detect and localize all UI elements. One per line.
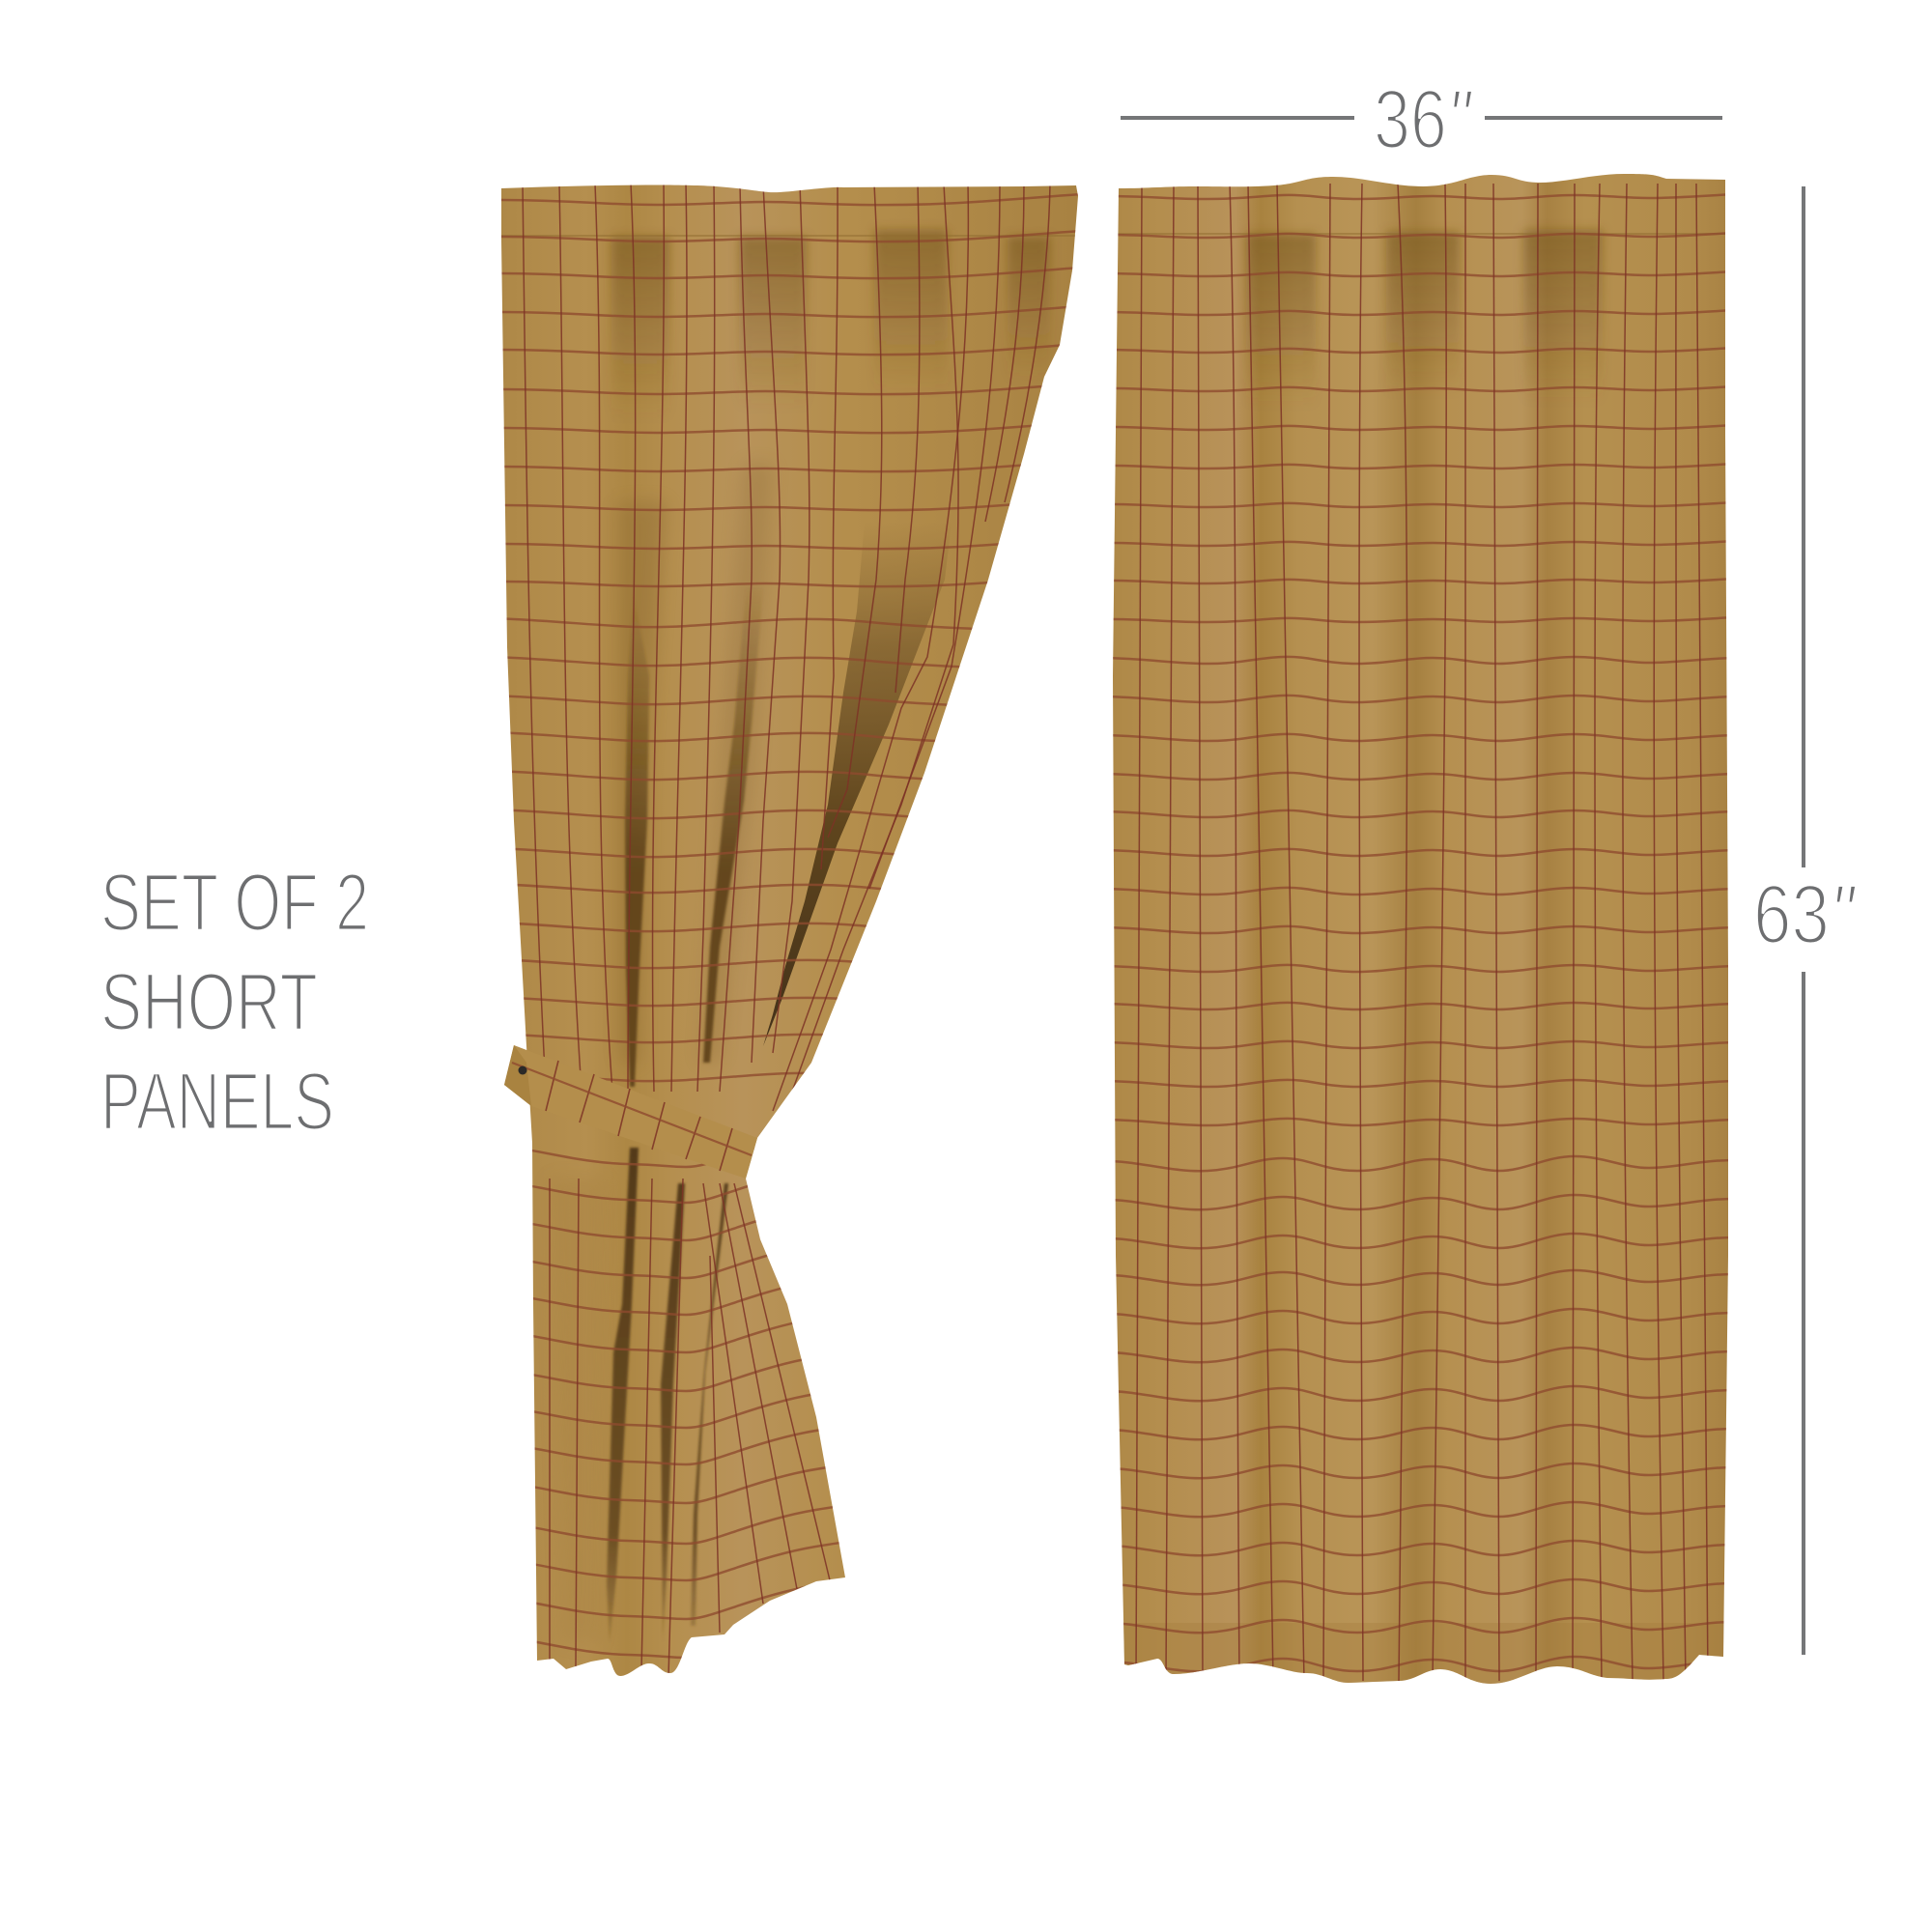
left curtain fabric	[501, 185, 1078, 1676]
text block: set of 2 short panels: PANELS	[100, 1056, 334, 1147]
text block: set of 2 short panels	[100, 857, 369, 1147]
text block: set of 2 short panels: SET OF 2	[100, 857, 369, 948]
left curtain horizontal plaid lines	[493, 194, 1082, 1658]
height dimension: 63 inches	[1753, 186, 1857, 1655]
right curtain horizontal plaid lines	[1106, 194, 1734, 1671]
right curtain vertical plaid lines	[1136, 184, 1708, 1681]
tieback button	[518, 1066, 527, 1074]
right curtain pleat shading	[1111, 230, 1729, 1690]
width dimension: 36 inches: 36"	[1374, 73, 1473, 166]
text block: set of 2 short panels: SHORT	[100, 956, 318, 1047]
left curtain fold shading	[501, 230, 1081, 1642]
right curtain panel, hanging straight	[1106, 174, 1734, 1690]
width dimension: 36 inches	[1121, 73, 1722, 166]
tieback band	[504, 1045, 757, 1179]
left curtain vertical plaid lines	[523, 184, 1050, 1676]
right curtain fabric	[1113, 174, 1728, 1684]
left curtain panel, tied back	[493, 184, 1082, 1676]
height dimension: 63 inches: 63"	[1753, 868, 1857, 961]
